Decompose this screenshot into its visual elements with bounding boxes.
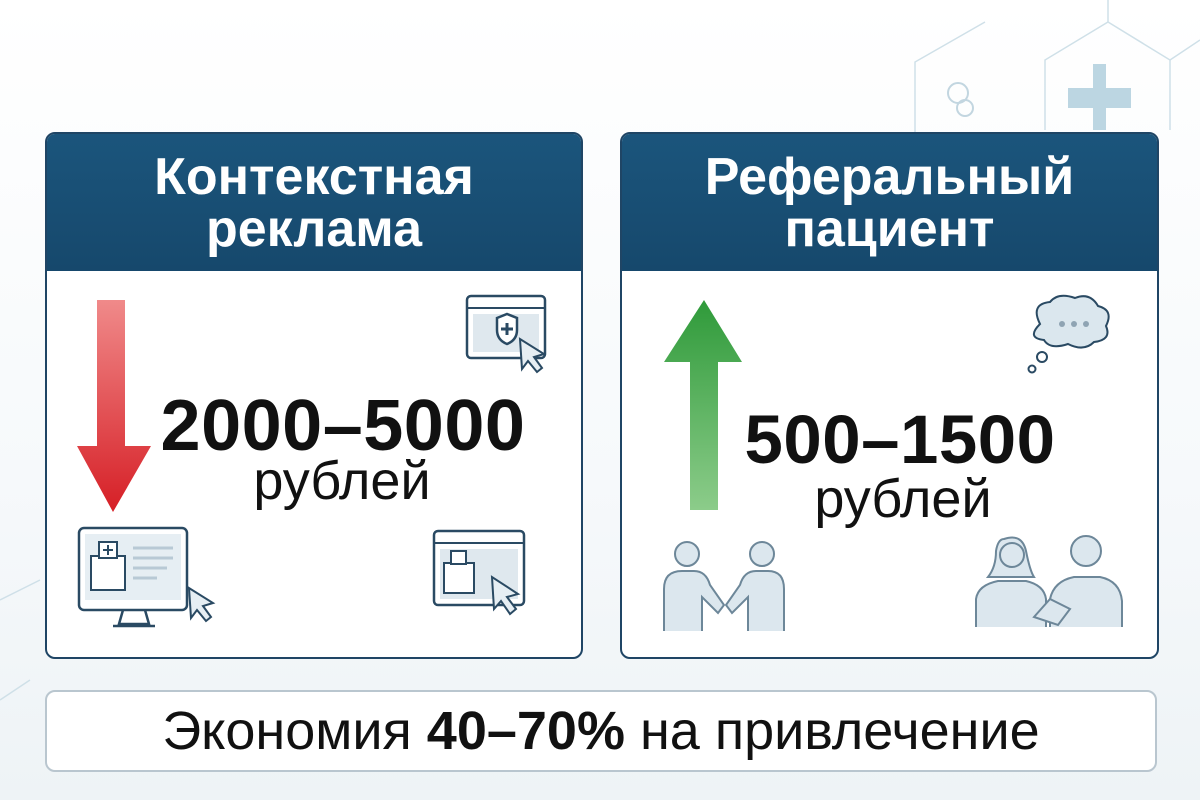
price: 2000–5000: 2000–5000 [161,386,525,466]
arrow: green up [664,300,742,510]
label: рублей: рублей [253,451,431,511]
heading: Контекстная реклама [47,134,581,271]
callout: savings [45,690,1157,772]
arrow: red down [77,300,151,512]
icon: monitor clinic [78,526,216,628]
heading: Контекстная реклама: Контекстная [154,148,474,206]
heading: Реферальный пациент: пациент [784,200,995,258]
panel: referral patient [620,132,1159,659]
icon: handshake people [663,541,785,631]
label: рублей: рублей [814,469,992,529]
heading: Реферальный пациент: Реферальный [705,148,1074,206]
heading: Контекстная реклама: реклама [206,200,422,258]
icon: thought cloud [1028,294,1110,374]
callout: savings: 40–70% [427,701,625,761]
icon: woman and man [975,535,1123,627]
callout: savings: Экономия на привлечение [162,701,1040,761]
price: 500–1500: 500–1500 [744,401,1056,478]
icon: browser shield [466,294,546,374]
heading: Реферальный пациент [622,134,1157,271]
panel: contextual ads [45,132,583,659]
icon: browser clinic click [432,530,526,616]
